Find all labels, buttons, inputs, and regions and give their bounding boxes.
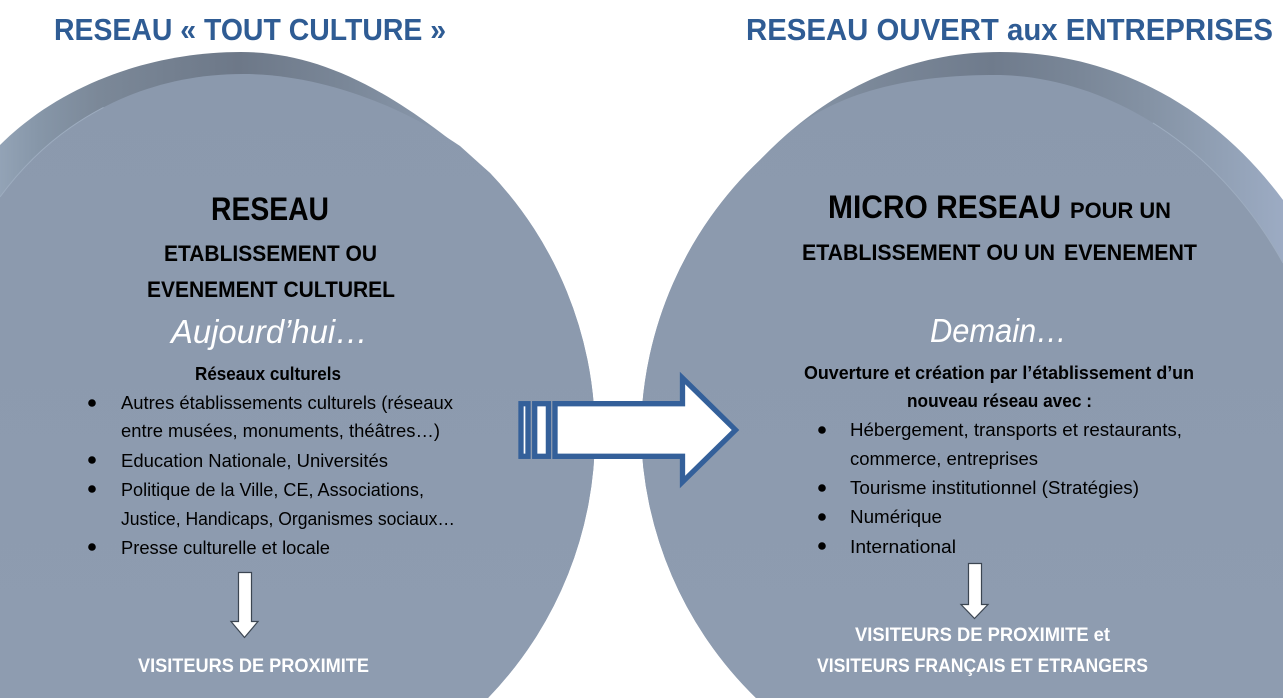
- label: aujourd'hui: Aujourd’hui…: [169, 313, 368, 350]
- bullet list: nouveau réseau: Hébergement, transports et restaurants,: [850, 420, 1182, 440]
- subheading: établissement ou un événement: ETABLISSEMENT OU UN: [802, 240, 1055, 265]
- bevel highlight: [1153, 123, 1283, 263]
- list heading: réseaux culturels: Réseaux culturels: [195, 364, 341, 384]
- bullet list: réseaux culturels: Education Nationale, Universités: [121, 451, 388, 471]
- result: visiteurs de proximité et français et étrangers: VISITEURS DE PROXIMITE et: [855, 625, 1111, 646]
- bullet list: nouveau réseau: Tourisme institutionnel (Stratégies): [850, 478, 1139, 498]
- intro text: ouverture et création: [804, 363, 1194, 411]
- bullet list: réseaux culturels: Justice, Handicaps, Organismes sociaux…: [121, 509, 455, 529]
- intro text: ouverture et création: nouveau réseau avec :: [907, 391, 1092, 411]
- result: visiteurs de proximité et français et étrangers: VISITEURS FRANÇAIS ET ETRANGERS: [817, 656, 1148, 677]
- label: demain: Demain…: [930, 312, 1067, 349]
- circle face: [641, 75, 1283, 698]
- bullet list: nouveau réseau: [818, 420, 1182, 557]
- circle bevel: [0, 52, 595, 698]
- subheading: établissement ou un événement: EVENEMENT: [1064, 240, 1198, 265]
- bullet list: réseaux culturels: entre musées, monuments, théâtres…): [121, 421, 440, 441]
- panel: right circle: [641, 52, 1283, 698]
- heading: reseau: RESEAU: [211, 191, 329, 227]
- heading: micro reseau pour un: POUR UN: [1070, 198, 1171, 223]
- bullet list: réseaux culturels: Autres établissements culturels (réseaux: [121, 393, 453, 413]
- subheading line 2: EVENEMENT CULTUREL: [147, 277, 395, 302]
- intro text: ouverture et création: Ouverture et création par l’établissement d’un: [804, 363, 1194, 383]
- circle bevel: [641, 52, 1283, 698]
- bullet list: nouveau réseau: International: [850, 537, 956, 557]
- bullet list: nouveau réseau: Numérique: [850, 507, 942, 527]
- subheading: établissement ou un événement: [802, 240, 1198, 265]
- subheading line 1: ETABLISSEMENT OU: [164, 241, 377, 266]
- bullet list: réseaux culturels: [88, 393, 455, 558]
- heading: micro reseau pour un: MICRO RESEAU: [828, 189, 1061, 225]
- bevel highlight: [0, 107, 104, 197]
- arrow: transition from left to right: [521, 378, 736, 482]
- bullet list: nouveau réseau: commerce, entreprises: [850, 449, 1038, 469]
- arrow: down to visitors: [231, 572, 258, 638]
- bullet list: réseaux culturels: Politique de la Ville, CE, Associations,: [121, 480, 424, 500]
- result: visiteurs de proximité: VISITEURS DE PROXIMITE: [138, 656, 369, 677]
- panel: left circle: [0, 52, 595, 698]
- circle face: [0, 74, 595, 698]
- bullet list: réseaux culturels: Presse culturelle et locale: [121, 538, 330, 558]
- result: visiteurs de proximité et français et étrangers: [817, 625, 1148, 677]
- arrow: down to visitors: [961, 564, 988, 618]
- title: réseau tout culture: RESEAU « TOUT CULTURE »: [54, 12, 446, 47]
